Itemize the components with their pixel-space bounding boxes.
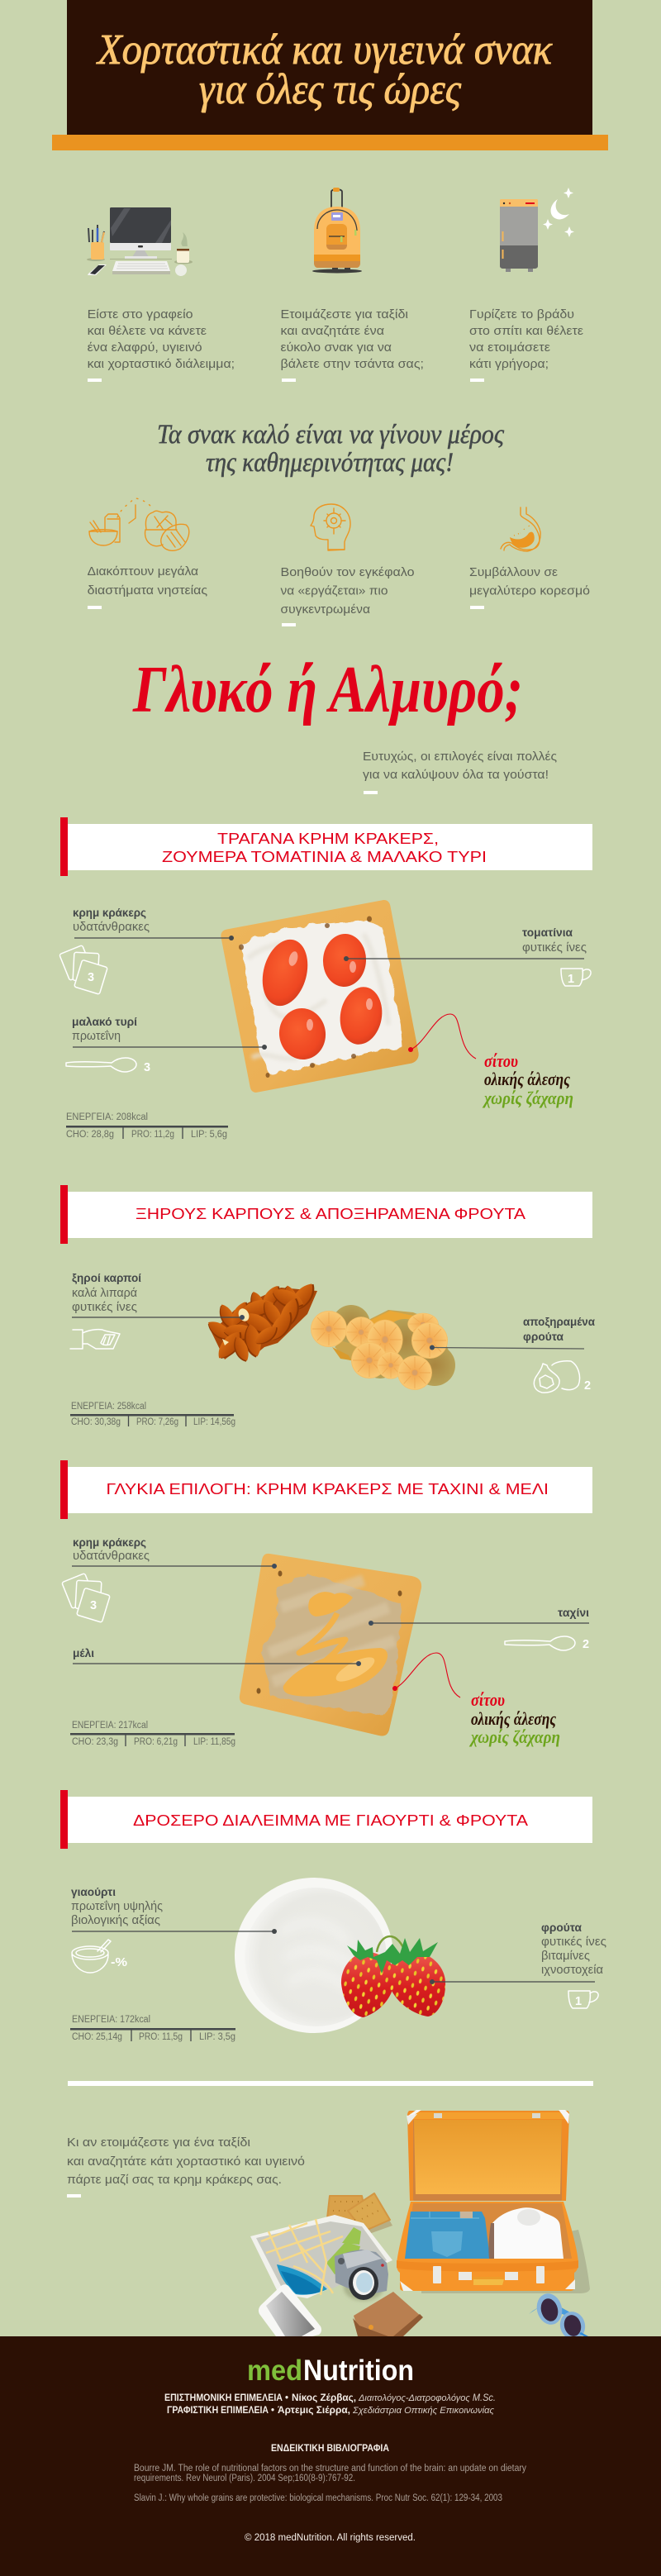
callout: honey [73, 1646, 361, 1666]
section header: crackers with tomatoes [60, 817, 592, 876]
credits: Σχεδιάστρια Οπτικής Επικοινωνίας [352, 2406, 494, 2416]
icon: three crackers 2 [62, 1574, 110, 1622]
callout: cracker: υδατάνθρακες [73, 921, 150, 934]
callout: yogurt [71, 1885, 277, 1934]
text block: back home: Γυρίζετε το βράδυ [469, 308, 574, 321]
nutrition facts: yogurt: ΕΝΕΡΓΕΙΑ: 172kcal [72, 2015, 150, 2025]
illustration: dried fruit [311, 1305, 455, 1390]
tomatoes [255, 933, 387, 1063]
section header: crackers with tomatoes: ΤΡΑΓΑΝΑ ΚΡΗΜ ΚΡΑΚΕΡΣ, [217, 830, 439, 847]
nutrition facts: yogurt [70, 2015, 235, 2042]
credits: ΓΡΑΦΙΣΤΙΚΗ ΕΠΙΜΕΛΕΙΑ [167, 2406, 269, 2416]
icon: two spoons [505, 1636, 589, 1651]
nutrition facts: crackers with tomatoes: LIP: 5,6g [191, 1130, 227, 1140]
nutrition facts: nuts: ΕΝΕΡΓΕΙΑ: 258kcal [71, 1402, 146, 1412]
credits: Άρτεμις Σιέρρα, [278, 2406, 350, 2416]
icon: office desk [87, 207, 193, 279]
callout: whole grain: σίτου [484, 1050, 518, 1071]
section header: yogurt and fruit [60, 1790, 592, 1849]
callout: nuts: καλά λιπαρά [72, 1287, 137, 1300]
bibliography: ΕΝΔΕΙΚΤΙΚΗ ΒΙΒΛΙΟΓΡΑΦΙΑ [271, 2444, 389, 2454]
logo: medNutrition: med [247, 2355, 302, 2387]
illustration: smartphone [259, 2284, 321, 2336]
nutrition facts: yogurt: CHO: 25,14g [72, 2032, 122, 2042]
subheading: Τα σνακ καλό είναι να γίνουν μέρος [157, 420, 505, 450]
callout: cracker: κρημ κράκερς [73, 906, 146, 919]
callout: soft cheese [72, 1015, 267, 1050]
callout: fruit: βιταμίνες [541, 1950, 590, 1963]
title banner [52, 0, 608, 150]
callout: dried fruit [430, 1315, 595, 1350]
callout: nuts: ξηροί καρποί [72, 1271, 141, 1284]
text block: travel tip: Κι αν ετοιμάζεστε για ένα ταξίδι [67, 2136, 250, 2150]
icon: three crackers [59, 945, 107, 994]
text block: satiety [469, 566, 590, 609]
text block: brain: Βοηθούν τον εγκέφαλο [281, 566, 415, 579]
section header: nuts and dried fruit: ΞΗΡΟΥΣ ΚΑΡΠΟΥΣ & ΑΠΟΞΗΡΑΜΕΝΑ ΦΡΟΥΤΑ [136, 1205, 526, 1222]
title: Χορταστικά και υγιεινά σνακ [96, 26, 553, 74]
text block: brain: συγκεντρωμένα [281, 603, 370, 617]
credits: ΕΠΙΣΤΗΜΟΝΙΚΗ ΕΠΙΜΕΛΕΙΑ [164, 2393, 283, 2403]
section header: sweet option [60, 1460, 592, 1519]
logo: medNutrition: Nutrition [303, 2355, 414, 2387]
credits: • [271, 2406, 274, 2416]
callout: yogurt: πρωτεΐνη υψηλής [71, 1900, 163, 1913]
callout: whole grain 2 [392, 1653, 560, 1747]
bibliography [134, 2444, 526, 2503]
nutrition facts: crackers with tomatoes [66, 1112, 228, 1140]
nutrition facts: nuts: PRO: 7,26g [136, 1417, 178, 1427]
honey drizzle [283, 1592, 388, 1697]
text block: satiety: μεγαλύτερο κορεσμό [469, 585, 590, 598]
illustration: wallet [353, 2292, 423, 2336]
credits: • [285, 2393, 288, 2403]
text block: at the office [88, 308, 235, 382]
callout: honey: μέλι [73, 1646, 94, 1659]
text block: travelling: και αναζητάτε ένα [281, 325, 384, 338]
callout: fruit [430, 1921, 606, 1984]
section header: crackers with tomatoes: ΖΟΥΜΕΡΑ ΤΟΜΑΤΙΝΙΑ & ΜΑΛΑΚΟ ΤΥΡΙ [162, 848, 487, 865]
callout: yogurt: βιολογικής αξίας [71, 1914, 160, 1927]
nutrition facts: sweet option: PRO: 6,21g [134, 1737, 178, 1747]
subheading [157, 420, 505, 478]
section header: nuts and dried fruit [60, 1185, 592, 1244]
callout: tahini [369, 1606, 589, 1626]
text block: travel tip: και αναζητάτε κάτι χορταστικό και υγιεινό [67, 2155, 305, 2169]
nutrition facts: crackers with tomatoes: PRO: 11,2g [131, 1130, 174, 1140]
icon: three crackers: 3 [88, 971, 94, 984]
suitcase lid [407, 2110, 569, 2201]
callout: whole grain: χωρίς ζάχαρη [482, 1088, 573, 1108]
credits: Νίκος Ζέρβας, [292, 2393, 356, 2403]
callout: cracker [73, 906, 234, 940]
illustration: cracker with tahini and honey [241, 1555, 420, 1734]
icon: three spoons: 3 [144, 1061, 150, 1074]
text block: travel tip: πάρτε μαζί σας τα κρημ κράκερς σας. [67, 2174, 282, 2187]
callout: fruit: φρούτα [541, 1921, 582, 1934]
icon: one cup [561, 969, 591, 986]
nutrition facts: sweet option: ΕΝΕΡΓΕΙΑ: 217kcal [72, 1721, 148, 1731]
callout: whole grain 2: σίτου [471, 1689, 505, 1710]
callout: tomatoes [344, 926, 587, 961]
icon: three spoons [66, 1058, 150, 1074]
illustration: open suitcase [397, 2110, 590, 2293]
nutrition facts: sweet option: LIP: 11,85g [193, 1737, 235, 1747]
text block: at the office: και θέλετε να κάνετε [88, 325, 207, 338]
text block: at the office: και χορταστικό διάλειμμα; [88, 358, 235, 371]
white shirt [488, 2207, 564, 2259]
title: για όλες τις ώρες [199, 66, 462, 113]
text block: brain [281, 566, 415, 626]
callout: whole grain 2: χωρίς ζάχαρη [468, 1726, 560, 1747]
icon: one cup 2: 1 [575, 1995, 582, 2008]
callout: soft cheese: πρωτεΐνη [72, 1030, 121, 1043]
callout: tomatoes: τοματίνια [522, 926, 573, 939]
illustration: two small crackers [326, 2193, 392, 2235]
logo: medNutrition [247, 2355, 414, 2387]
icon: one cup: 1 [568, 973, 574, 986]
text block: travelling: Ετοιμάζεστε για ταξίδι [281, 308, 408, 321]
text block: back home [469, 308, 584, 382]
text block: back home: κάτι γρήγορα; [469, 358, 549, 371]
callout: whole grain [408, 1014, 573, 1108]
text block: brain: να «εργάζεται» πιο [281, 585, 388, 598]
nutrition facts: sweet option [70, 1721, 235, 1747]
callout: cracker 2: υδατάνθρακες [73, 1550, 150, 1563]
section header: yogurt and fruit: ΔΡΟΣΕΡΟ ΔΙΑΛΕΙΜΜΑ ΜΕ ΓΙΑΟΥΡΤΙ & ΦΡΟΥΤΑ [133, 1812, 529, 1829]
title [96, 26, 553, 113]
bibliography: Bourre JM. The role of nutritional factors on the structure and function of the brain: an update on dietary [134, 2464, 526, 2474]
text block: at the office: ένα ελαφρύ, υγιεινό [88, 341, 202, 355]
bibliography: Slavin J.: Why whole grains are protective: biological mechanisms. Proc Nutr Soc. 62(1): 129-34, 2003 [134, 2493, 502, 2503]
callout: whole grain 2: ολικής άλεσης [471, 1708, 556, 1729]
icon: two figs: 2 [584, 1379, 591, 1393]
text block: travelling: εύκολο σνακ για να [281, 341, 392, 355]
illustration: map [250, 2215, 392, 2298]
callout: cracker 2 [72, 1536, 277, 1569]
subheading: της καθημερινότητας μας! [206, 448, 454, 478]
bibliography: requirements. Rev Neurol (Paris). 2004 Sep;160(8-9):767-92. [134, 2474, 355, 2483]
callout: fruit: ιχνοστοχεία [541, 1964, 603, 1977]
text block: fasting: διαστήματα νηστείας [88, 584, 207, 598]
illustration: yogurt [235, 1878, 393, 2033]
credits [164, 2393, 496, 2416]
icon: handful [70, 1330, 120, 1349]
nutrition facts: sweet option: CHO: 23,3g [72, 1737, 118, 1747]
illustration: almonds [204, 1279, 320, 1364]
icon: two figs [534, 1361, 591, 1393]
text block: fasting: Διακόπτουν μεγάλα [88, 565, 198, 579]
suitcase base [397, 2202, 578, 2291]
section header: sweet option: ΓΛΥΚΙΑ ΕΠΙΛΟΓΗ: ΚΡΗΜ ΚΡΑΚΕΡΣ ΜΕ ΤΑΧΙΝΙ & ΜΕΛΙ [106, 1480, 549, 1498]
icon: one cup 2 [568, 1991, 598, 2008]
illustration: camera [335, 2250, 388, 2301]
icon: three crackers 2: 3 [90, 1599, 97, 1612]
callout: soft cheese: μαλακό τυρί [72, 1015, 137, 1028]
callout: cracker 2: κρημ κράκερς [73, 1536, 146, 1549]
copyright: © 2018 medNutrition. All rights reserved. [245, 2533, 416, 2543]
text block: travelling: βάλετε στην τσάντα σας; [281, 358, 424, 371]
jeans [405, 2212, 490, 2259]
callout: dried fruit: φρούτα [523, 1330, 564, 1343]
nutrition facts: nuts: CHO: 30,38g [71, 1417, 121, 1427]
text block: at the office: Είστε στο γραφείο [88, 308, 193, 321]
text block: travel tip [67, 2136, 305, 2197]
text block: many options: Ευτυχώς, οι επιλογές είναι πολλές [363, 750, 557, 764]
big heading: sweet or savoury: Γλυκό ή Αλμυρό; [132, 654, 523, 726]
footer panel [0, 2336, 661, 2576]
text block: fasting [88, 565, 207, 609]
illustration: sunglasses [529, 2291, 588, 2342]
nutrition facts: nuts: LIP: 14,56g [193, 1417, 235, 1427]
callout: tahini: ταχίνι [558, 1606, 589, 1619]
nutrition facts: crackers with tomatoes: CHO: 28,8g [66, 1130, 114, 1140]
icon: yogurt cup low fat [72, 1940, 127, 1973]
nutrition facts: nuts [70, 1402, 235, 1427]
text block: many options: για να καλύψουν όλα τα γούστα! [363, 769, 549, 782]
text block: travelling [281, 308, 424, 382]
nutrition facts: yogurt: PRO: 11,5g [139, 2032, 183, 2042]
text block: back home: στο σπίτι και θέλετε [469, 325, 584, 338]
icon: stomach [501, 507, 540, 551]
text block: satiety: Συμβάλλουν σε [469, 566, 559, 579]
credits: Διαιτολόγος-Διατροφολόγος M.Sc. [358, 2393, 496, 2403]
illustration: cracker with cheese and tomatoes [223, 902, 416, 1090]
callout: whole grain: ολικής άλεσης [484, 1069, 570, 1089]
callout: yogurt: γιαούρτι [71, 1885, 116, 1898]
callout: nuts: φυτικές ίνες [72, 1301, 137, 1314]
icon: meals and clock [89, 498, 189, 550]
callout: dried fruit: αποξηραμένα [523, 1315, 595, 1328]
callout: fruit: φυτικές ίνες [541, 1936, 606, 1949]
text block: back home: να ετοιμάσετε [469, 341, 551, 355]
icon: suitcase [312, 188, 362, 273]
icon: two spoons: 2 [583, 1638, 589, 1651]
callout: tomatoes: φυτικές ίνες [522, 941, 587, 955]
text block: many options [363, 750, 557, 794]
icon: head with gear [311, 504, 350, 550]
divider [68, 2081, 593, 2086]
icon: yogurt cup low fat: -% [111, 1956, 127, 1969]
nutrition facts: crackers with tomatoes: ΕΝΕΡΓΕΙΑ: 208kcal [66, 1112, 148, 1122]
nutrition facts: yogurt: LIP: 3,5g [199, 2032, 235, 2042]
icon: fridge and moon [500, 188, 574, 272]
illustration: strawberries [341, 1936, 445, 2017]
callout: nuts [72, 1271, 245, 1320]
